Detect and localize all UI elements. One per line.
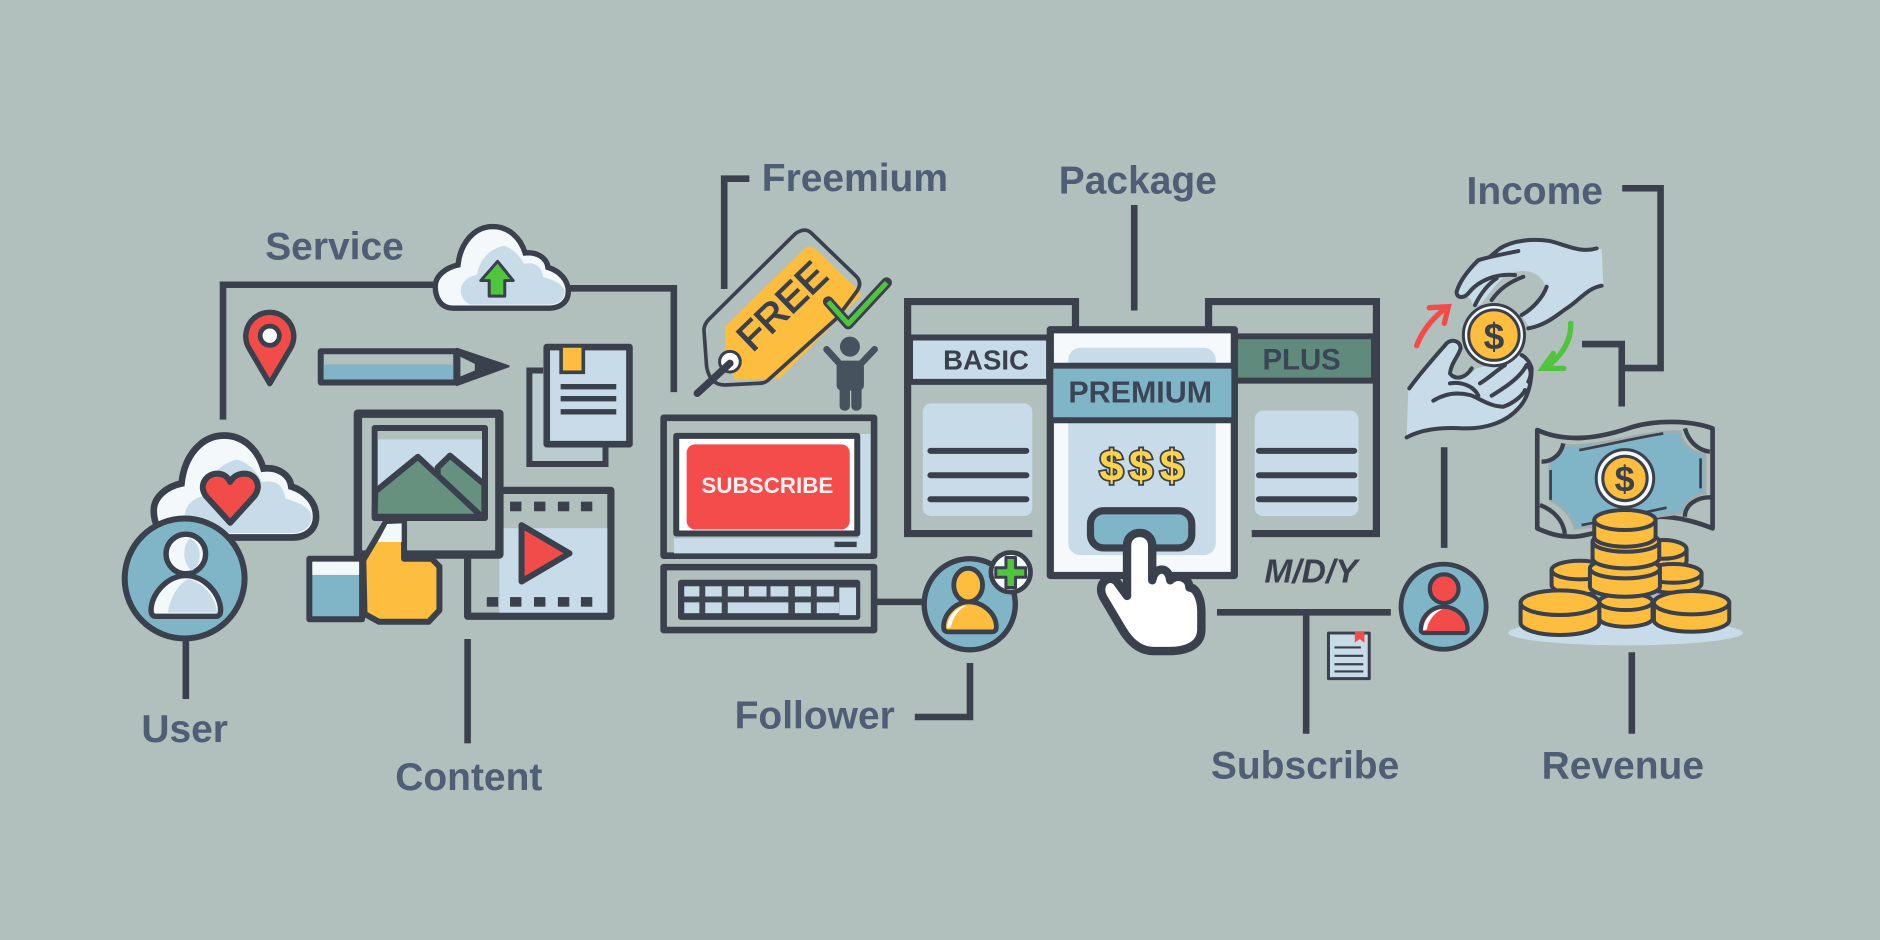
icon: coin exchanged: $ — [1484, 315, 1505, 357]
arrow: green downward — [1543, 323, 1571, 368]
connector: subscriber to hands — [1441, 447, 1447, 548]
label: Content: Content — [395, 756, 542, 799]
panel: basic plan: BASIC — [943, 344, 1029, 375]
label: Revenue: Revenue — [1542, 745, 1704, 788]
icon: pointing hand — [1101, 533, 1201, 651]
icon: coin exchanged — [1463, 305, 1525, 366]
label: Income: Income — [1467, 170, 1603, 213]
connector: freemium bracket — [724, 179, 749, 289]
connector: package — [1131, 205, 1137, 311]
icon: hand receiving coin — [1407, 341, 1532, 437]
icon: person with raised arms — [827, 337, 875, 411]
connector: income bracket — [1582, 188, 1661, 406]
connector: subscribe — [1217, 612, 1391, 734]
price symbols: $ — [1099, 443, 1123, 491]
icon: computer monitor — [664, 418, 874, 556]
icon: banknote: $ — [1615, 459, 1635, 500]
connector: user to service to subscribe screen — [223, 285, 674, 420]
connector: revenue — [1629, 652, 1635, 734]
icon: subscriber avatar — [1401, 564, 1486, 649]
price symbols: $ — [1160, 443, 1184, 491]
panel: plus plan — [1209, 302, 1376, 534]
icon: heart cloud — [154, 436, 316, 537]
icon: follower avatar with plus — [924, 552, 1031, 650]
connector: keyboard to follower — [876, 599, 924, 605]
icon: banknote — [1537, 422, 1713, 537]
label: M/D/Y billing: M/D/Y — [1264, 554, 1360, 591]
panel: premium plan — [1050, 330, 1234, 576]
icon: coin stacks — [1508, 510, 1743, 645]
panel: basic plan — [908, 302, 1075, 534]
label: Subscribe: Subscribe — [1211, 745, 1399, 788]
button: subscribe: SUBSCRIBE — [701, 473, 833, 498]
icon: hand giving coin — [1457, 240, 1603, 328]
icon: picture frame — [358, 414, 499, 555]
icon: keyboard — [664, 567, 874, 630]
button: subscribe — [687, 444, 850, 529]
label: Follower: Follower — [735, 694, 895, 737]
label: Service: Service — [265, 226, 404, 269]
icon: pencil — [321, 349, 508, 385]
connector: follower to label — [915, 663, 970, 717]
connector: content to label — [465, 639, 470, 743]
icon: document stack — [529, 347, 629, 464]
icon: free price tag: FREE — [729, 253, 836, 359]
icon: service cloud with upload arrow — [435, 227, 568, 308]
icon: small document — [1328, 632, 1369, 679]
icon: user avatar — [125, 519, 245, 638]
label: User: User — [141, 708, 228, 751]
icon: free price tag — [697, 230, 887, 393]
connector: user to label — [183, 640, 189, 699]
panel: premium plan: PREMIUM — [1068, 375, 1212, 409]
panel: plus plan: PLUS — [1262, 343, 1341, 376]
price symbols: $ — [1129, 443, 1153, 491]
icon: video frame — [468, 490, 611, 616]
price symbols — [1099, 443, 1184, 491]
label: Package: Package — [1059, 160, 1217, 203]
label: Freemium: Freemium — [762, 157, 948, 200]
arrow: red upward — [1417, 307, 1448, 346]
icon: thumbs up — [309, 520, 439, 622]
icon: location pin — [246, 312, 294, 384]
